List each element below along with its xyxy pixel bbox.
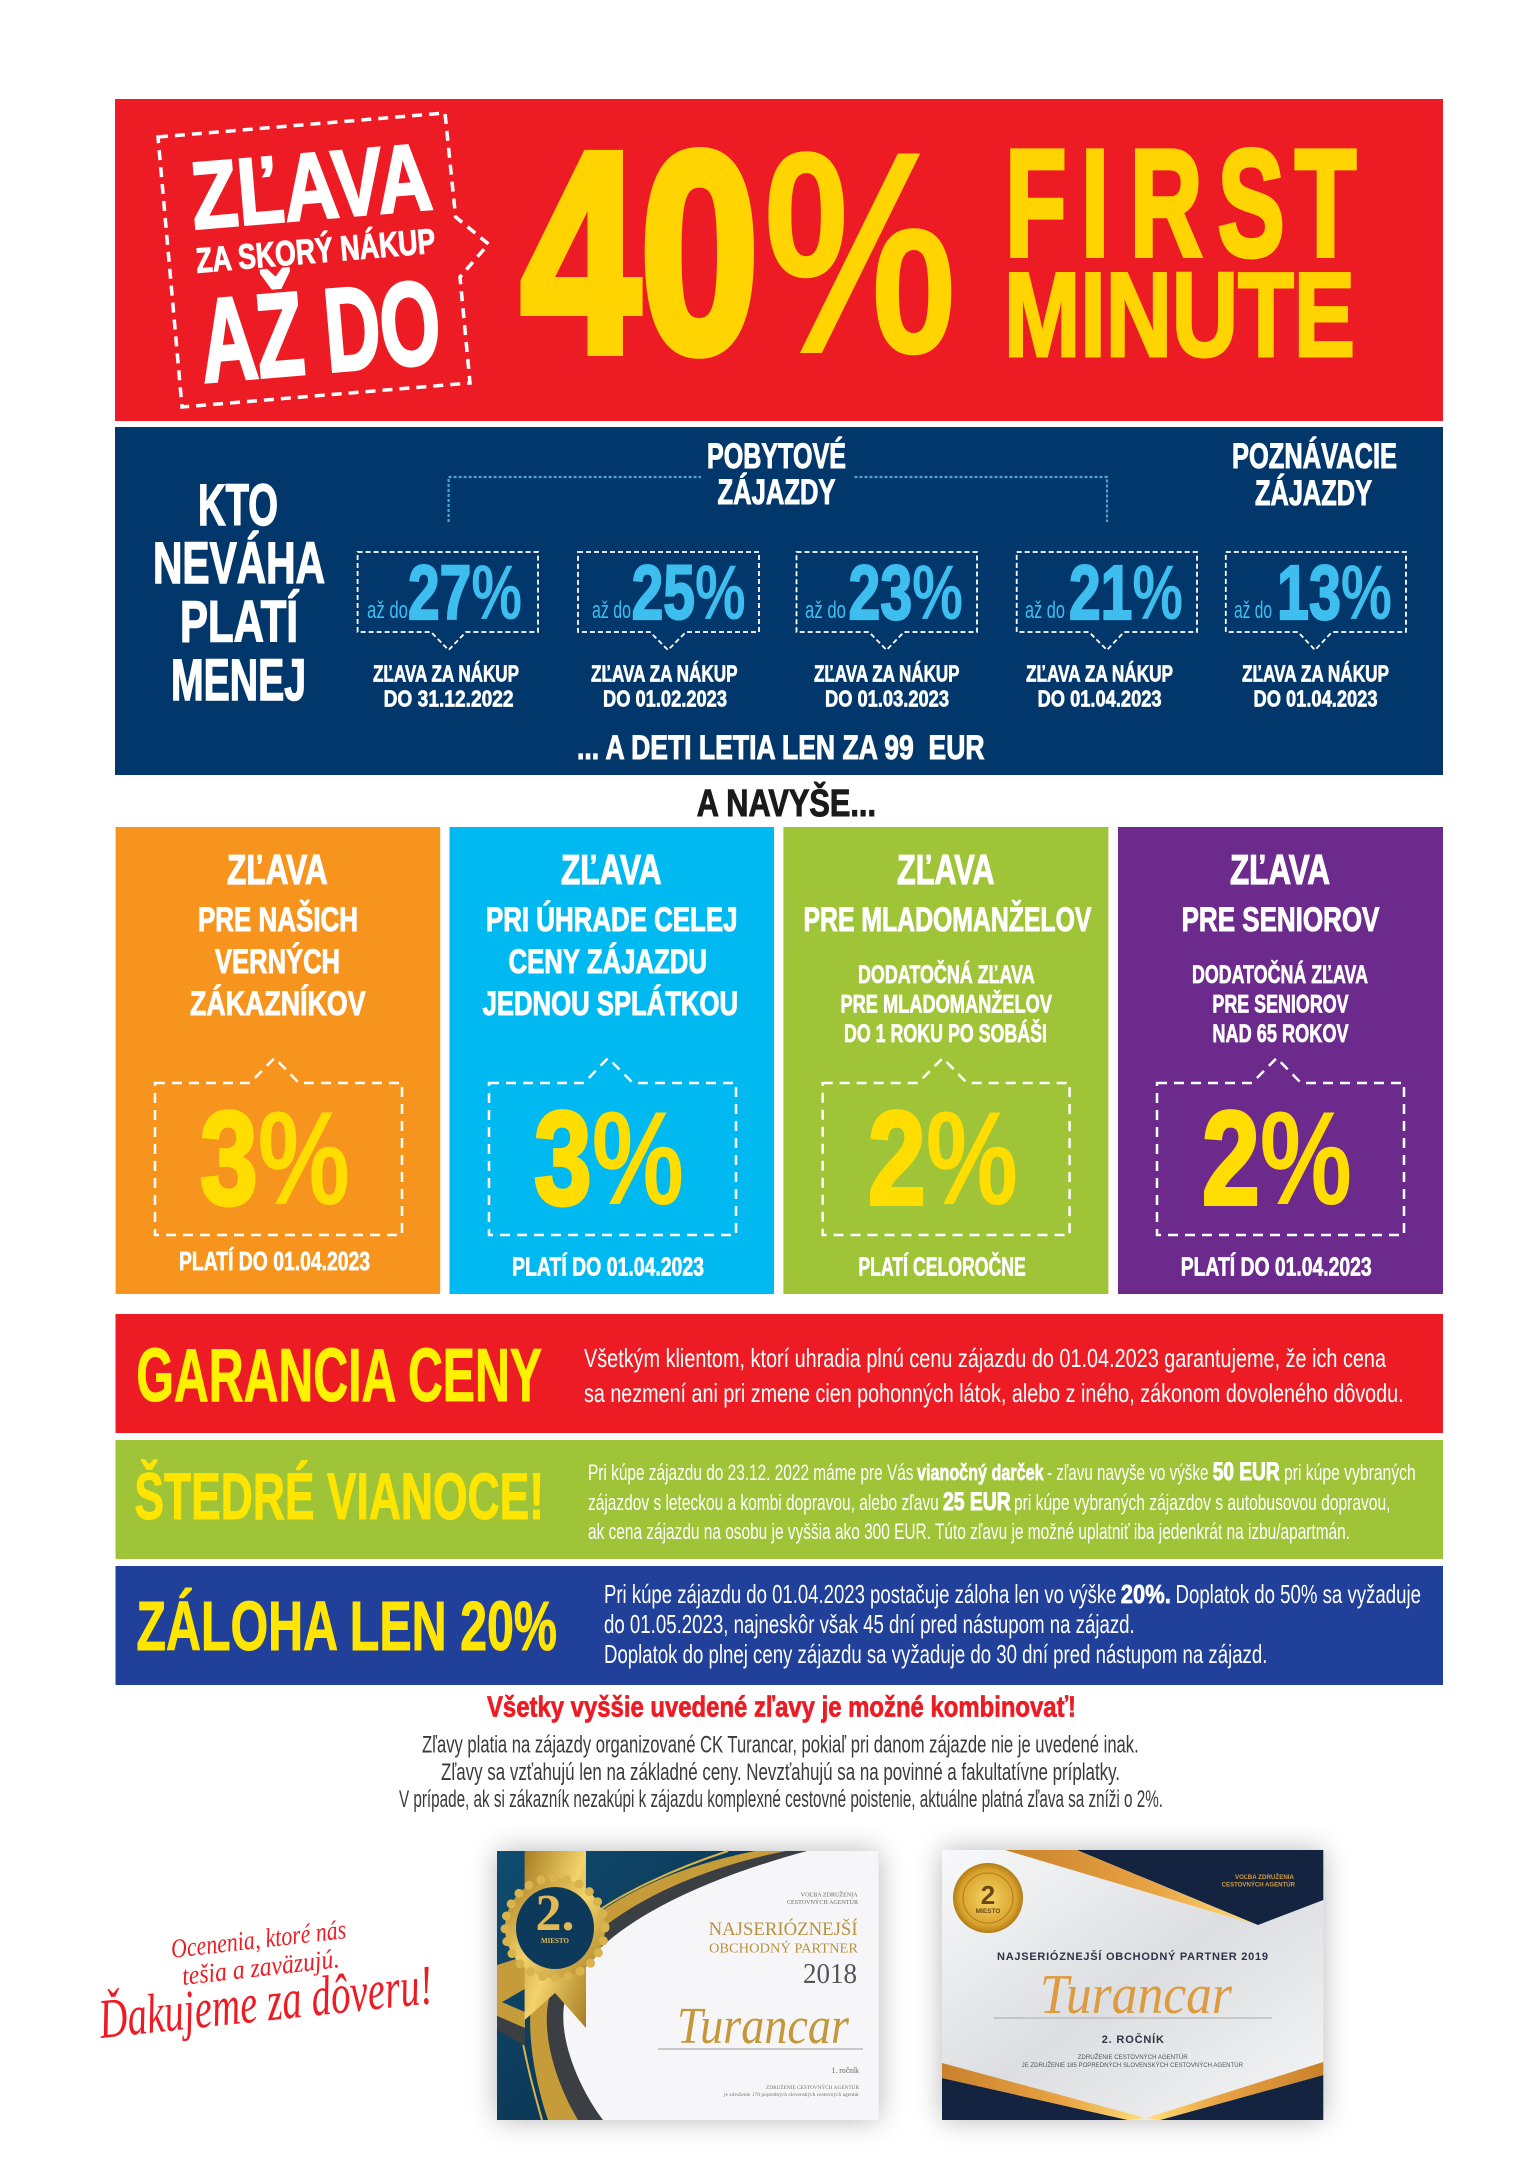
gold medal: MIESTO [976,1908,1000,1915]
discount box 23%: DO 01.03.2023 [825,686,949,712]
panel: štedré vianoce [116,1440,1443,1559]
panel: záloha len 20%: Doplatok do 50% sa vyžaduje [1176,1579,1421,1609]
left heading: NEVÁHA [153,531,325,596]
panel: green newlyweds: 2% [868,1085,1018,1233]
discount box 25%: DO 01.02.2023 [603,686,727,712]
panel: purple seniors: PLATÍ DO 01.04.2023 [1181,1252,1372,1282]
certificate 2018: 2018 [803,1958,857,1990]
panel: green newlyweds: PRE MLADOMANŽELOV [804,901,1092,939]
handwritten thanks: Ďakujeme za dôveru! [95,1953,436,2051]
column heading: pobytové zájazdy: POBYTOVÉ [707,436,846,476]
handwritten thanks: Ocenenia, ktoré nás [169,1914,348,1964]
certificate 2018: CESTOVNÝCH AGENTÚR [787,1898,858,1906]
certificate 2019: ZDRUŽENIE CESTOVNÝCH AGENTÚR [1078,2053,1188,2061]
discount box 27% [358,550,538,712]
red note: Všetky vyššie uvedené zľavy je možné kombinovať! [487,1692,1076,1724]
certificate 2019: VOĽBA ZDRUŽENIA [1235,1873,1295,1881]
big discount 40: 40 [521,94,759,412]
discount box 13%: až do [1234,597,1272,624]
heading: a navyše: A NAVYŠE... [697,780,876,825]
certificate 2019: NAJSERIÓZNEJŠÍ OBCHODNÝ PARTNER 2019 [997,1950,1268,1963]
discount box 25%: 25% [632,550,746,636]
panel: záloha len 20%: Doplatok do plnej ceny zájazdu sa vyžaduje do 30 dní pred nástupom na zájazd. [604,1639,1267,1669]
discount box 27%: až do [367,597,408,624]
left heading: MENEJ [171,648,306,713]
dashed price tag [158,113,488,407]
certificate 2019: JE ZDRUŽENIE 185 POPREDNÝCH SLOVENSKÝCH CESTOVNÝCH AGENTÚR [1022,2061,1244,2069]
panel: štedré vianoce: Pri kúpe zájazdu do 23.12. 2022 máme pre Vás [588,1460,914,1485]
panel: záloha len 20%: ZÁLOHA LEN 20% [136,1587,557,1665]
panel: green newlyweds: ZĽAVA [897,846,994,893]
panel: garancia ceny [116,1314,1443,1433]
panel: green newlyweds: DO 1 ROKU PO SOBÁŠI [844,1018,1047,1048]
panel: garancia ceny: GARANCIA CENY [136,1333,542,1417]
column heading: poznávacie zájazdy: POZNÁVACIE [1232,436,1397,476]
discount box 13% [1226,550,1406,712]
column heading: poznávacie zájazdy: ZÁJAZDY [1255,473,1372,513]
panel: štedré vianoce: vianočný darček [917,1460,1044,1485]
medal badge: MIESTO [541,1937,569,1945]
panel: štedré vianoce: pri kúpe vybraných zájazdov s autobusovou dopravou, [1014,1490,1390,1515]
discount box 25%: ZĽAVA ZA NÁKUP [591,660,738,687]
panel: záloha len 20%: do 01.05.2023, najneskôr však 45 dní pred nástupom na zájazd. [604,1609,1135,1639]
discount box 27%: DO 31.12.2022 [384,686,514,712]
certificate 2019: Turancar [1040,1964,1232,2026]
medal badge: 2. [536,1885,574,1942]
panel: štedré vianoce: ŠTEDRÉ VIANOCE! [134,1459,544,1533]
certificate 2019: 2. ROČNÍK [1102,2033,1164,2046]
panel: orange loyal customers [116,827,440,1294]
discount box 23% [796,550,977,712]
certificate 2018: NAJSERIÓZNEJŠÍ [709,1918,858,1940]
panel: záloha len 20%: 20%. [1121,1579,1171,1609]
fine print [399,1732,1163,1813]
panel: orange loyal customers: VERNÝCH [215,943,340,981]
certificate 2019 [942,1850,1323,2120]
left heading [153,473,325,713]
column heading: pobytové zájazdy: ZÁJAZDY [718,472,836,512]
tag subheading: ZA SKORÝ NÁKUP [194,221,437,281]
handwritten thanks [95,1914,436,2051]
panel: purple seniors: PRE SENIOROV [1212,991,1349,1019]
left heading: PLATÍ [180,590,299,655]
panel: orange loyal customers: ZÁKAZNÍKOV [190,985,366,1023]
medal badge [505,1878,605,1978]
panel: purple seniors: ZĽAVA [1230,846,1330,893]
column heading: poznávacie zájazdy [1232,436,1397,513]
panel: purple seniors: NAD 65 ROKOV [1212,1020,1349,1048]
discount box 13%: ZĽAVA ZA NÁKUP [1242,660,1389,687]
discount box 21%: 21% [1069,550,1183,636]
discount box 21% [1017,550,1197,712]
fine print: Zľavy sa vzťahujú len na základné ceny. Nevzťahujú sa na povinné a fakultatívne príplatky. [441,1759,1120,1786]
panel: štedré vianoce: zájazdov s leteckou a kombi dopravou, alebo zľavu [588,1490,939,1515]
gold medal: 2 [981,1880,995,1910]
panel: first minute banner [115,91,1443,421]
panel: cyan one payment: JEDNOU SPLÁTKOU [483,985,738,1023]
left heading: KTO [198,473,278,538]
panel: orange loyal customers: 3% [200,1085,350,1233]
panel: záloha len 20% [116,1566,1443,1685]
certificate 2018: VOĽBA ZDRUŽENIA [801,1891,858,1899]
panel: orange loyal customers: ZĽAVA [227,846,328,893]
panel: cyan one payment: ZĽAVA [561,846,662,893]
discount box 21%: DO 01.04.2023 [1038,686,1162,712]
panel: purple seniors: PRE SENIOROV [1182,901,1380,939]
discount box 23%: až do [805,597,846,624]
panel: štedré vianoce: 50 EUR [1213,1458,1280,1486]
discount box 27%: 27% [408,550,522,636]
discount box 13%: 13% [1277,550,1392,636]
discount box 27%: ZĽAVA ZA NÁKUP [373,660,519,687]
panel: cyan one payment: PLATÍ DO 01.04.2023 [512,1252,704,1282]
panel: cyan one payment [450,827,774,1294]
certificate 2018: 1. ročník [832,2066,859,2075]
panel: štedré vianoce: 25 EUR [943,1488,1011,1516]
certificate 2019: CESTOVNÝCH AGENTÚR [1222,1882,1296,1889]
gold medal [953,1863,1023,1933]
panel: cyan one payment: 3% [534,1085,684,1233]
FIRST: FIRST [1005,119,1356,289]
panel: purple seniors [1118,827,1443,1294]
discount box 21%: až do [1025,597,1065,624]
panel: cyan one payment: CENY ZÁJAZDU [508,943,707,981]
panel: štedré vianoce: - zľavu navyše vo výške [1047,1460,1208,1485]
panel: green newlyweds: DODATOČNÁ ZĽAVA [858,959,1035,989]
big percent sign: % [763,91,957,415]
discount box 23%: 23% [848,550,963,636]
panel: kto neváha platí menej [115,427,1443,775]
tag heading: AŽ DO: AŽ DO [195,255,445,408]
tag heading: ZĽAVA: ZĽAVA [187,124,436,250]
certificate 2018 [497,1851,879,2120]
panel: green newlyweds: PLATÍ CELOROČNE [858,1252,1026,1282]
handwritten thanks: tešia a zaväzujú. [180,1943,341,1991]
panel: green newlyweds: PRE MLADOMANŽELOV [840,989,1052,1019]
panel: cyan one payment: PRI ÚHRADE CELEJ [486,901,738,939]
panel: purple seniors: 2% [1202,1085,1352,1233]
MINUTE: MINUTE [1004,248,1355,382]
panel: purple seniors: DODATOČNÁ ZĽAVA [1192,959,1368,989]
panel: green newlyweds [783,827,1108,1294]
fine print: Zľavy platia na zájazdy organizované CK Turancar, pokiaľ pri danom zájazde nie je uvedené inak. [422,1732,1139,1759]
certificate 2018: ZDRUŽENIE CESTOVNÝCH AGENTÚR [766,2085,860,2091]
discount box 21%: ZĽAVA ZA NÁKUP [1026,660,1173,687]
discount box 25% [578,550,759,712]
certificate 2018: OBCHODNÝ PARTNER [709,1940,859,1957]
panel: orange loyal customers: PRE NAŠICH [198,900,358,939]
panel: záloha len 20%: Pri kúpe zájazdu do 01.04.2023 postačuje záloha len vo výške [604,1579,1116,1609]
discount box 13%: DO 01.04.2023 [1254,686,1378,712]
panel: štedré vianoce: pri kúpe vybraných [1284,1460,1416,1485]
children line: ... A DETI LETIA LEN ZA 99 EUR [577,729,985,767]
column heading: pobytové zájazdy [707,436,846,512]
certificate 2018: Turancar [677,1998,850,2055]
discount box 23%: ZĽAVA ZA NÁKUP [814,660,960,687]
panel: orange loyal customers: PLATÍ DO 01.04.2023 [179,1246,370,1276]
discount box 25%: až do [592,597,631,624]
certificate 2018: je združenie 170 popredných slovenských cestovných agentúr [723,2093,859,2098]
